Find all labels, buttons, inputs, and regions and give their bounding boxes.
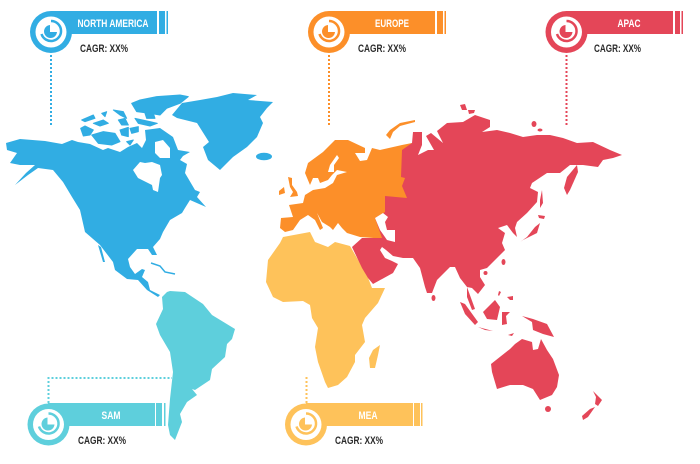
callout: SAM — [28, 378, 172, 447]
icon: pie chart — [296, 413, 316, 433]
label: NORTH AMERICA — [78, 18, 149, 30]
label: SAM — [102, 410, 120, 422]
region: Europe — [279, 120, 420, 240]
growth rate: CAGR: XX% — [594, 43, 641, 55]
growth rate: CAGR: XX% — [80, 43, 128, 55]
island: Greenland — [172, 93, 273, 170]
label: EUROPE — [375, 18, 409, 30]
island: Iceland — [256, 153, 272, 160]
callout: Europe — [308, 11, 446, 126]
callout: North America — [30, 11, 168, 126]
callout: MEA — [285, 377, 422, 447]
region: Asia Pacific — [352, 104, 622, 420]
region: North America — [6, 93, 273, 297]
icon: pie chart — [557, 21, 577, 41]
growth rate: CAGR: XX% — [78, 435, 126, 447]
island: New Zealand north — [593, 391, 602, 406]
island: Australia — [491, 339, 559, 400]
icon: pie chart — [39, 413, 59, 433]
label: APAC — [618, 18, 641, 30]
region: South America — [156, 291, 235, 440]
callout: APAC — [546, 11, 683, 126]
region: Africa and Madagascar — [266, 232, 385, 388]
island: Tasmania — [545, 406, 551, 412]
island: New Zealand south — [582, 407, 595, 420]
growth rate: CAGR: XX% — [358, 43, 406, 55]
growth rate: CAGR: XX% — [335, 435, 383, 447]
icon: pie chart — [42, 21, 61, 41]
label: MEA — [358, 410, 378, 422]
icon: pie chart — [320, 21, 339, 41]
